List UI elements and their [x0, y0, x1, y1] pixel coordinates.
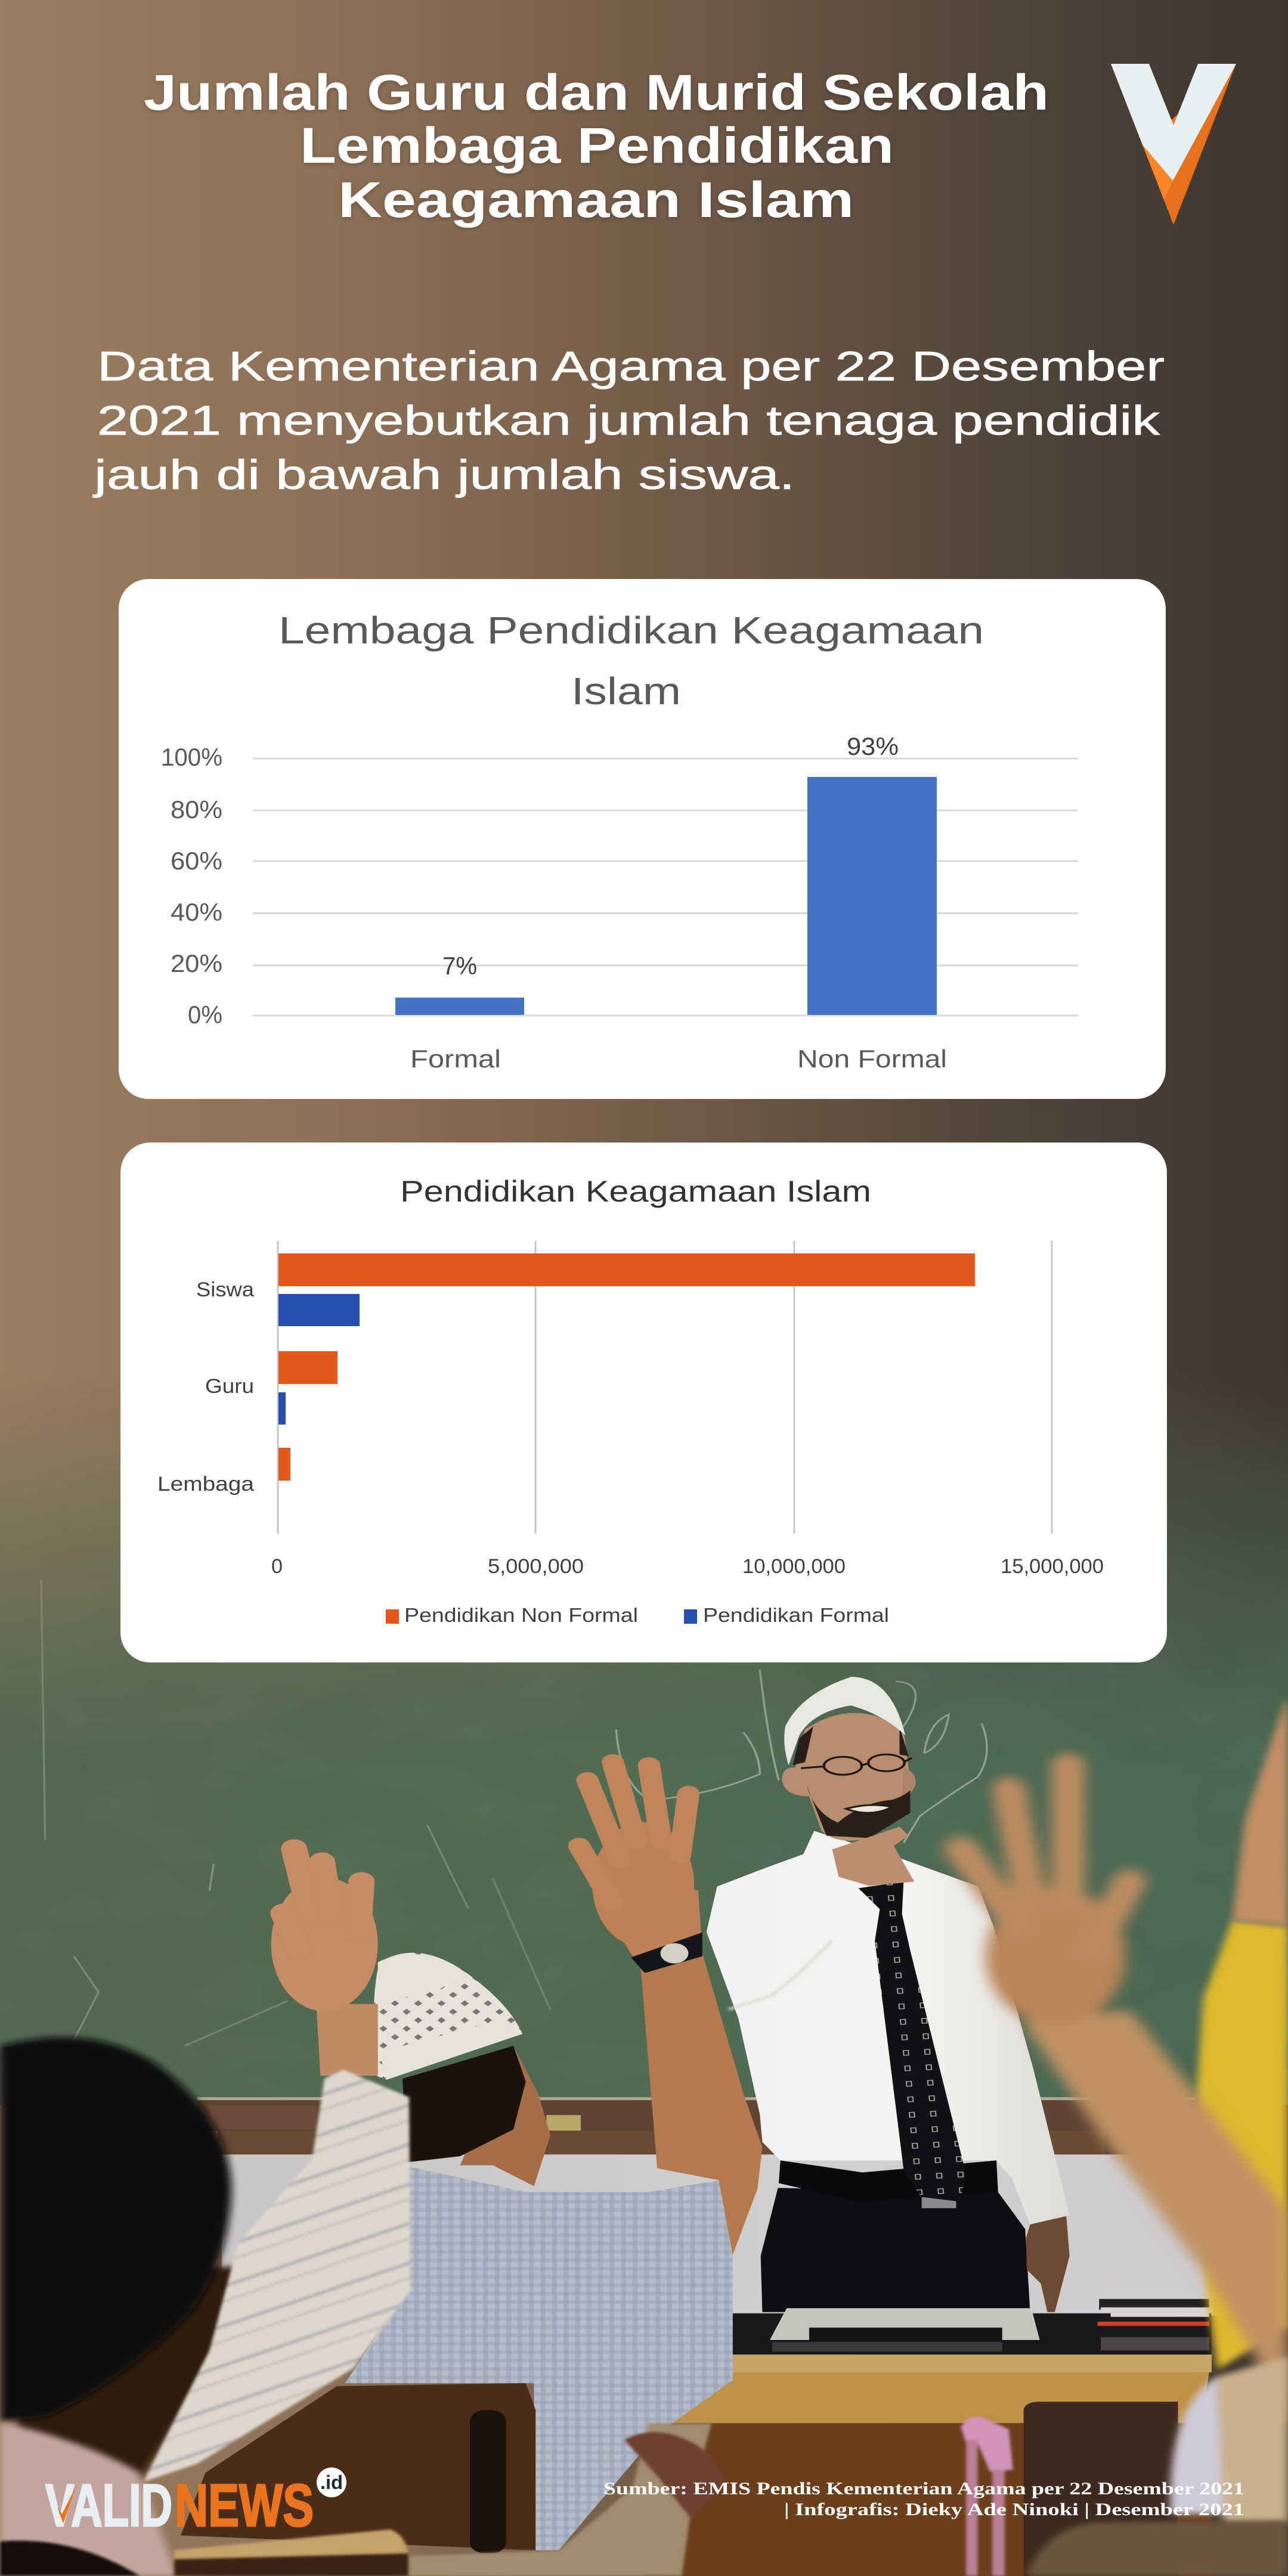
white shirt: [707, 1831, 1070, 2224]
V accent: [57, 2485, 76, 2524]
chalk ledge: [197, 2097, 1195, 2154]
category labels: Lembaga: [157, 1473, 254, 1496]
chart title: Pendidikan Keagamaan Islam: [400, 1175, 871, 1208]
student hand blurred right with arm: [961, 1765, 1288, 2434]
necktie: [859, 1882, 966, 2202]
x axis labels: 15,000,000: [1001, 1555, 1104, 1578]
source credit: Sumber: EMIS Pendis Kementerian Agama per 22 Desember 2021: [603, 2479, 1244, 2498]
bottom right chair back: [1027, 2521, 1288, 2576]
y axis labels: [161, 743, 222, 1029]
y axis labels: 20%: [171, 949, 222, 977]
striped sleeve: [144, 2070, 411, 2482]
bar: non formal 93%: [807, 777, 937, 1015]
sleeve fold shading: [729, 1941, 832, 2010]
middle student shirt: [246, 2165, 733, 2550]
category labels: [410, 1045, 947, 1073]
far right hand: [1232, 1699, 1288, 1927]
chart title: Islam: [571, 670, 681, 713]
chalkboard: [0, 1360, 1288, 2105]
wall: [222, 2154, 1224, 2315]
middle student head: [374, 1953, 550, 2186]
x axis labels: [271, 1555, 1104, 1578]
x axis labels: 0: [271, 1555, 283, 1578]
logo: V mark: [1111, 64, 1236, 225]
cloth bottom right: [1171, 2357, 1288, 2524]
bars: guru: [278, 1351, 338, 1425]
face: [782, 1713, 910, 1841]
title: Keagamaan Islam: [338, 172, 854, 228]
classroom photo: [0, 1677, 1288, 2576]
foreground table: [407, 2423, 711, 2576]
title: [144, 64, 1049, 228]
title: Jumlah Guru dan Murid Sekolah: [144, 64, 1049, 120]
student hand on table: [624, 2432, 723, 2518]
smile: [846, 1805, 892, 1813]
pink shirt: [0, 2422, 177, 2576]
books: [1097, 2299, 1209, 2351]
value labels: 7%: [442, 952, 477, 980]
category labels: Formal: [410, 1045, 501, 1073]
y axis labels: 100%: [161, 743, 222, 771]
foreground chair top: [174, 2529, 408, 2576]
belt: [779, 2160, 998, 2202]
teacher desk: [645, 2313, 1212, 2576]
category labels: Guru: [205, 1375, 254, 1398]
x axis labels: 10,000,000: [742, 1555, 846, 1578]
student prayer cap: [374, 1953, 522, 2080]
middle student right arm: [579, 1762, 762, 2255]
beard: [807, 1785, 910, 1838]
source credit: [603, 2479, 1244, 2519]
source credit: | Infografis: Dieky Ade Ninoki | Desember 2021: [784, 2500, 1244, 2519]
background fade over chalkboard: [0, 1360, 1288, 1715]
intro paragraph: jauh di bawah jumlah siswa.: [92, 451, 795, 498]
intro paragraph: [92, 343, 1165, 498]
lowered hand: [1026, 2215, 1070, 2312]
yellow sleeve: [1195, 1921, 1288, 2370]
pointing hand: [832, 1826, 914, 1886]
front student dark hair: [0, 2037, 231, 2422]
front student neck: [17, 2267, 242, 2482]
chart title: [278, 609, 984, 713]
x axis labels: 5,000,000: [488, 1555, 584, 1578]
laptop: [770, 2308, 1039, 2352]
y axis labels: 0%: [188, 1001, 222, 1029]
intro paragraph: Data Kementerian Agama per 22 Desember: [97, 343, 1165, 389]
y axis labels: 40%: [171, 898, 222, 926]
category labels: [157, 1278, 254, 1496]
front collar dark: [0, 2541, 140, 2576]
bar: lembaga: [278, 1448, 290, 1481]
logo: validnews.id: NEWS: [175, 2472, 314, 2539]
y axis labels: 60%: [171, 847, 222, 875]
pink suitcase handle: [961, 2417, 1013, 2576]
bars: siswa: [278, 1253, 975, 1326]
left hand raised: [271, 1849, 378, 2076]
logo: validnews.id: VALID: [45, 2472, 172, 2539]
y axis labels: 80%: [171, 795, 222, 823]
category labels: Siswa: [196, 1278, 254, 1301]
category labels: Non Formal: [797, 1045, 947, 1073]
glasses: [801, 1754, 912, 1775]
legend: Pendidikan Non Formal: [404, 1604, 638, 1626]
panel: column chart lembaga pendidikan: [119, 579, 1166, 1099]
hair: [792, 1726, 909, 1765]
legend: [386, 1604, 889, 1626]
value labels: 93%: [847, 732, 899, 760]
teacher: [707, 1677, 1070, 2312]
raised hand: [579, 1762, 702, 1956]
wristwatch: [631, 1933, 702, 1973]
white cap: [784, 1677, 905, 1765]
legend: Pendidikan Formal: [703, 1604, 889, 1626]
panel: bar chart pendidikan keagamaan islam: [120, 1143, 1167, 1662]
chart title: Lembaga Pendidikan Keagamaan: [278, 609, 984, 652]
intro paragraph: 2021 menyebutkan jumlah tenaga pendidik: [97, 397, 1160, 444]
value labels: [442, 732, 899, 980]
chair: [181, 2383, 535, 2553]
logo: validnews.id: [45, 2467, 346, 2539]
trousers: [761, 2188, 1030, 2312]
bar: formal 7%: [395, 998, 524, 1015]
logo: validnews.id: .id: [320, 2472, 343, 2493]
title: Lembaga Pendidikan: [300, 117, 894, 174]
